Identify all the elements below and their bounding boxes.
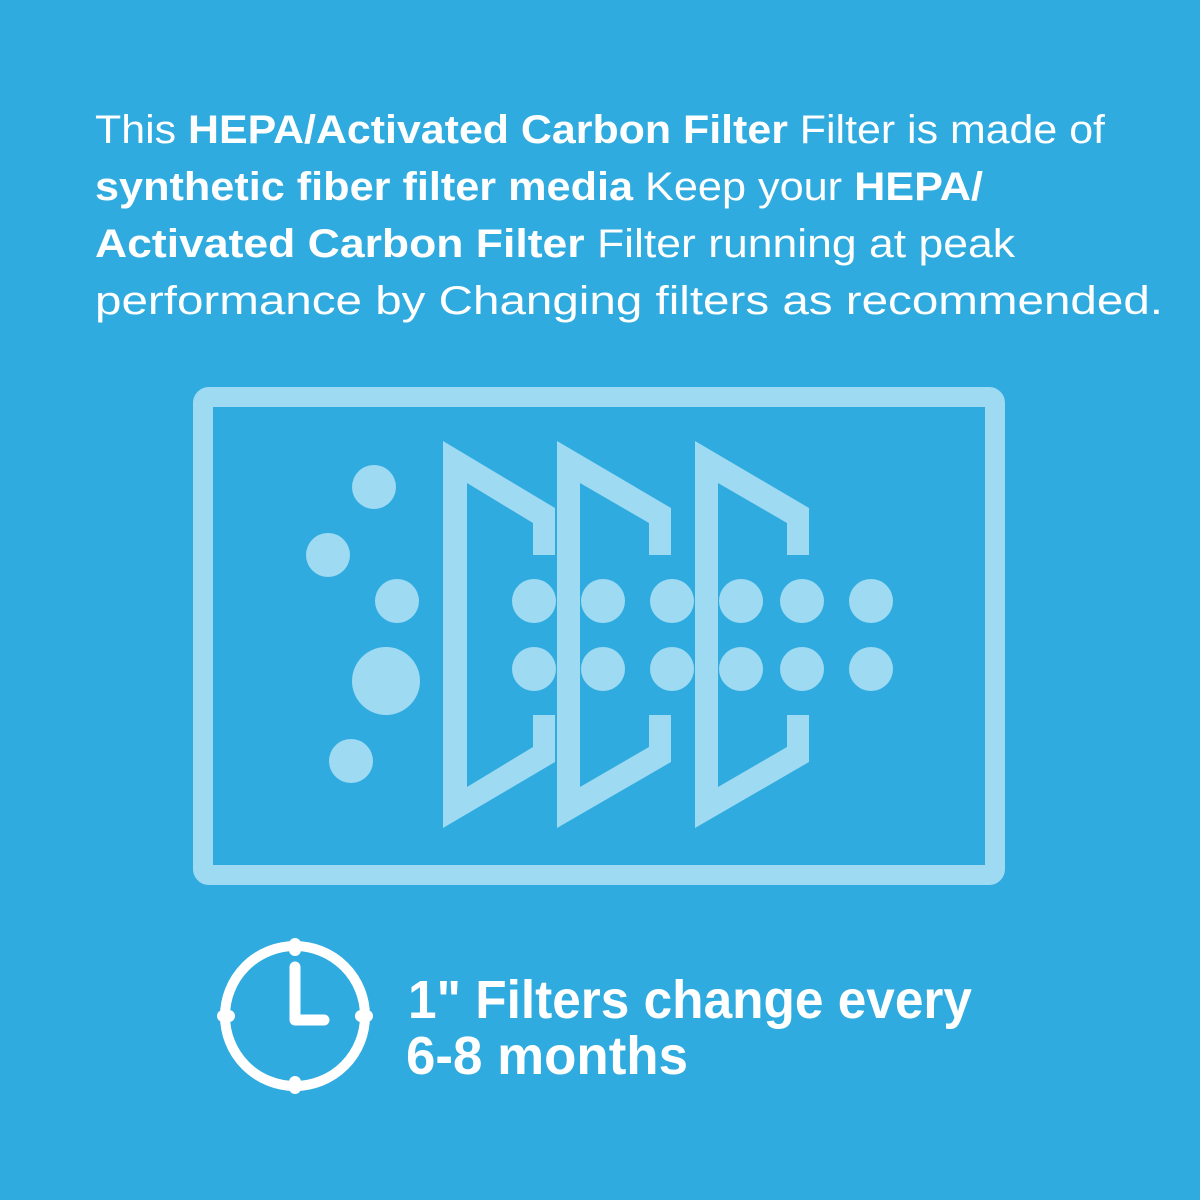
replacement interval text (406, 970, 972, 1086)
intro text block (95, 108, 1163, 323)
icon: clock (223, 944, 367, 1088)
intro text block: This HEPA/Activated Carbon Filter Filter is made of (95, 108, 1106, 152)
frame (203, 397, 995, 875)
intro text block: synthetic fiber filter media Keep your HEPA/ (95, 165, 983, 209)
replacement interval text: 1" Filters change every (408, 970, 972, 1030)
intro text block: Activated Carbon Filter Filter running at peak (95, 222, 1016, 266)
filter layers (443, 441, 809, 828)
intro text block: performance by Changing filters as recommended. (95, 279, 1163, 323)
replacement interval text: 6-8 months (406, 1026, 688, 1086)
incoming particles (306, 465, 420, 783)
filter illustration (203, 397, 995, 875)
filtered particles grid (512, 579, 893, 691)
